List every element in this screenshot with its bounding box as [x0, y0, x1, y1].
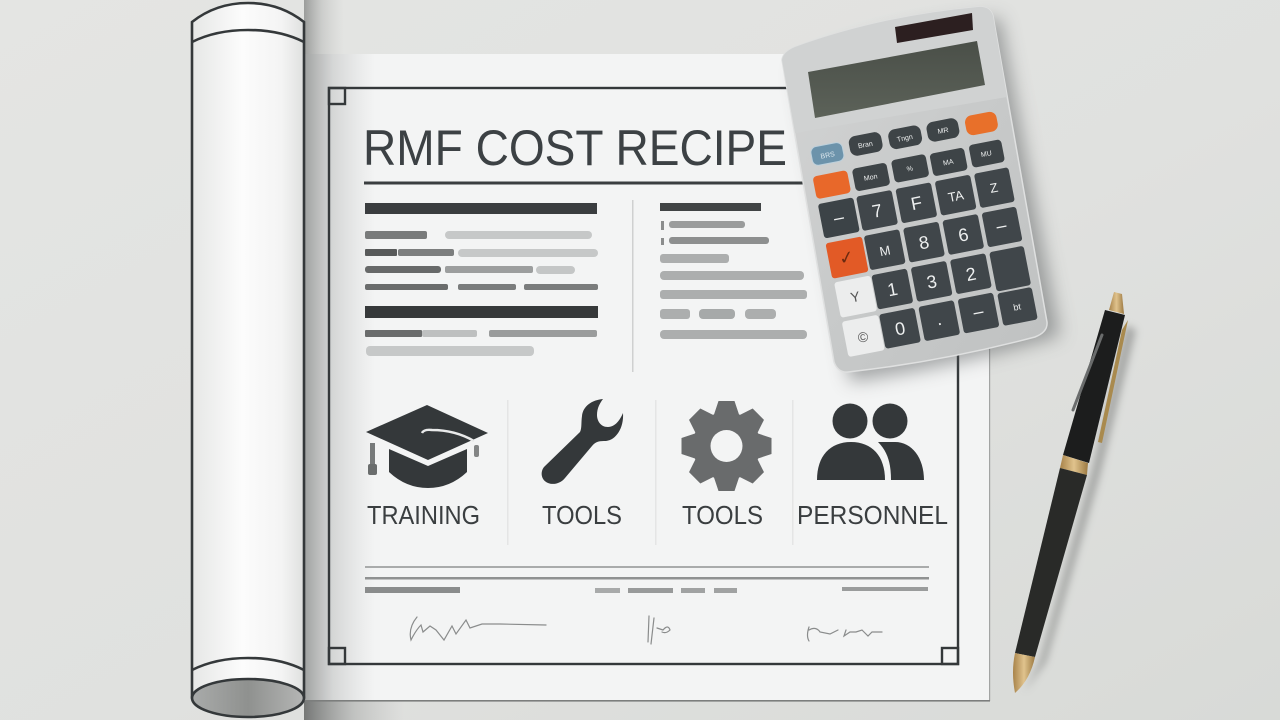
number keys: –	[832, 207, 846, 228]
number keys: Y	[849, 288, 862, 306]
column divider	[632, 200, 634, 372]
number keys: bt	[1012, 301, 1022, 313]
icon: wrench	[542, 399, 623, 484]
calculator upper panel	[782, 7, 1007, 133]
shadow below paper	[304, 701, 404, 720]
calculator body	[782, 7, 1047, 372]
top function keys: Mon	[863, 173, 878, 183]
number keys: –	[971, 301, 985, 322]
number keys: ✓	[837, 246, 856, 269]
pen	[1013, 292, 1136, 693]
top function keys: MU	[980, 150, 992, 159]
top function keys: Tngn	[896, 134, 914, 144]
paper sheet	[305, 54, 990, 702]
number keys: 0	[893, 318, 907, 340]
icon column dividers	[507, 400, 794, 545]
number keys: 3	[925, 271, 939, 293]
number keys	[818, 167, 1038, 357]
calculator	[782, 7, 1060, 382]
number keys: 7	[870, 200, 884, 222]
top function keys	[806, 109, 1005, 199]
display	[808, 41, 985, 118]
label: tools (gear): TOOLS	[682, 500, 763, 530]
title: RMF COST RECIPE	[363, 120, 787, 176]
number keys: TA	[947, 187, 965, 205]
document frame	[329, 88, 958, 664]
signatures	[410, 616, 882, 644]
number keys: –	[994, 215, 1008, 236]
paper roll	[192, 3, 304, 717]
icon: gear	[682, 401, 772, 491]
number keys: F	[909, 192, 924, 214]
label: personnel: PERSONNEL	[797, 500, 948, 530]
number keys: M	[878, 242, 892, 259]
number keys: ©	[856, 328, 870, 346]
icon: two people	[817, 404, 924, 480]
roll shadow on desk	[304, 0, 344, 54]
keypad	[806, 108, 1038, 357]
label: tools (wrench): TOOLS	[542, 500, 622, 530]
top function keys: Bran	[858, 141, 874, 150]
label: training: TRAINING	[367, 500, 480, 530]
number keys: Z	[989, 180, 999, 196]
calculator shadow	[796, 18, 1060, 382]
icon: graduation cap	[366, 405, 488, 488]
title rule	[364, 182, 804, 184]
top function keys: %	[906, 165, 914, 174]
number keys: 8	[917, 232, 931, 253]
number keys: 2	[964, 263, 978, 285]
number keys: .	[935, 309, 943, 329]
left text block	[365, 203, 598, 356]
top function keys: BRS	[820, 151, 836, 161]
right text block	[660, 203, 807, 339]
number keys: 1	[886, 279, 899, 300]
number keys: 6	[957, 224, 970, 246]
top function keys: MA	[943, 159, 954, 167]
solar strip	[895, 13, 973, 43]
top function keys: MR	[937, 127, 949, 136]
footer lines	[365, 566, 929, 593]
